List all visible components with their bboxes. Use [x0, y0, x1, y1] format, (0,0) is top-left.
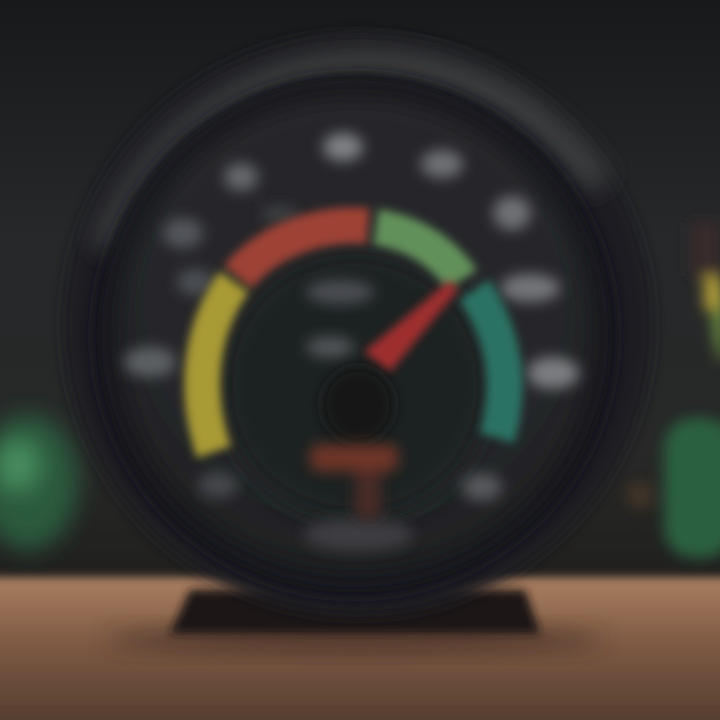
gauge stand: [170, 590, 540, 634]
wooden table: [0, 577, 720, 720]
inner dark dial: [220, 250, 490, 520]
arc: yellow: [202, 282, 234, 452]
red lower label: [310, 445, 398, 518]
hub: [322, 367, 394, 443]
arc: green: [376, 227, 462, 280]
outer ring: [63, 33, 653, 617]
gauge body: [63, 33, 653, 617]
dark rim: [93, 73, 617, 597]
dial face: [115, 95, 595, 575]
left green object: [0, 414, 78, 550]
table shadow: [105, 626, 605, 654]
arc: red: [238, 225, 368, 277]
colored arc: [202, 225, 505, 452]
arc: teal: [474, 290, 505, 438]
right green object: [626, 222, 720, 558]
dial numerals: [124, 133, 579, 551]
ring highlight: [105, 64, 600, 250]
needle: [364, 280, 458, 372]
